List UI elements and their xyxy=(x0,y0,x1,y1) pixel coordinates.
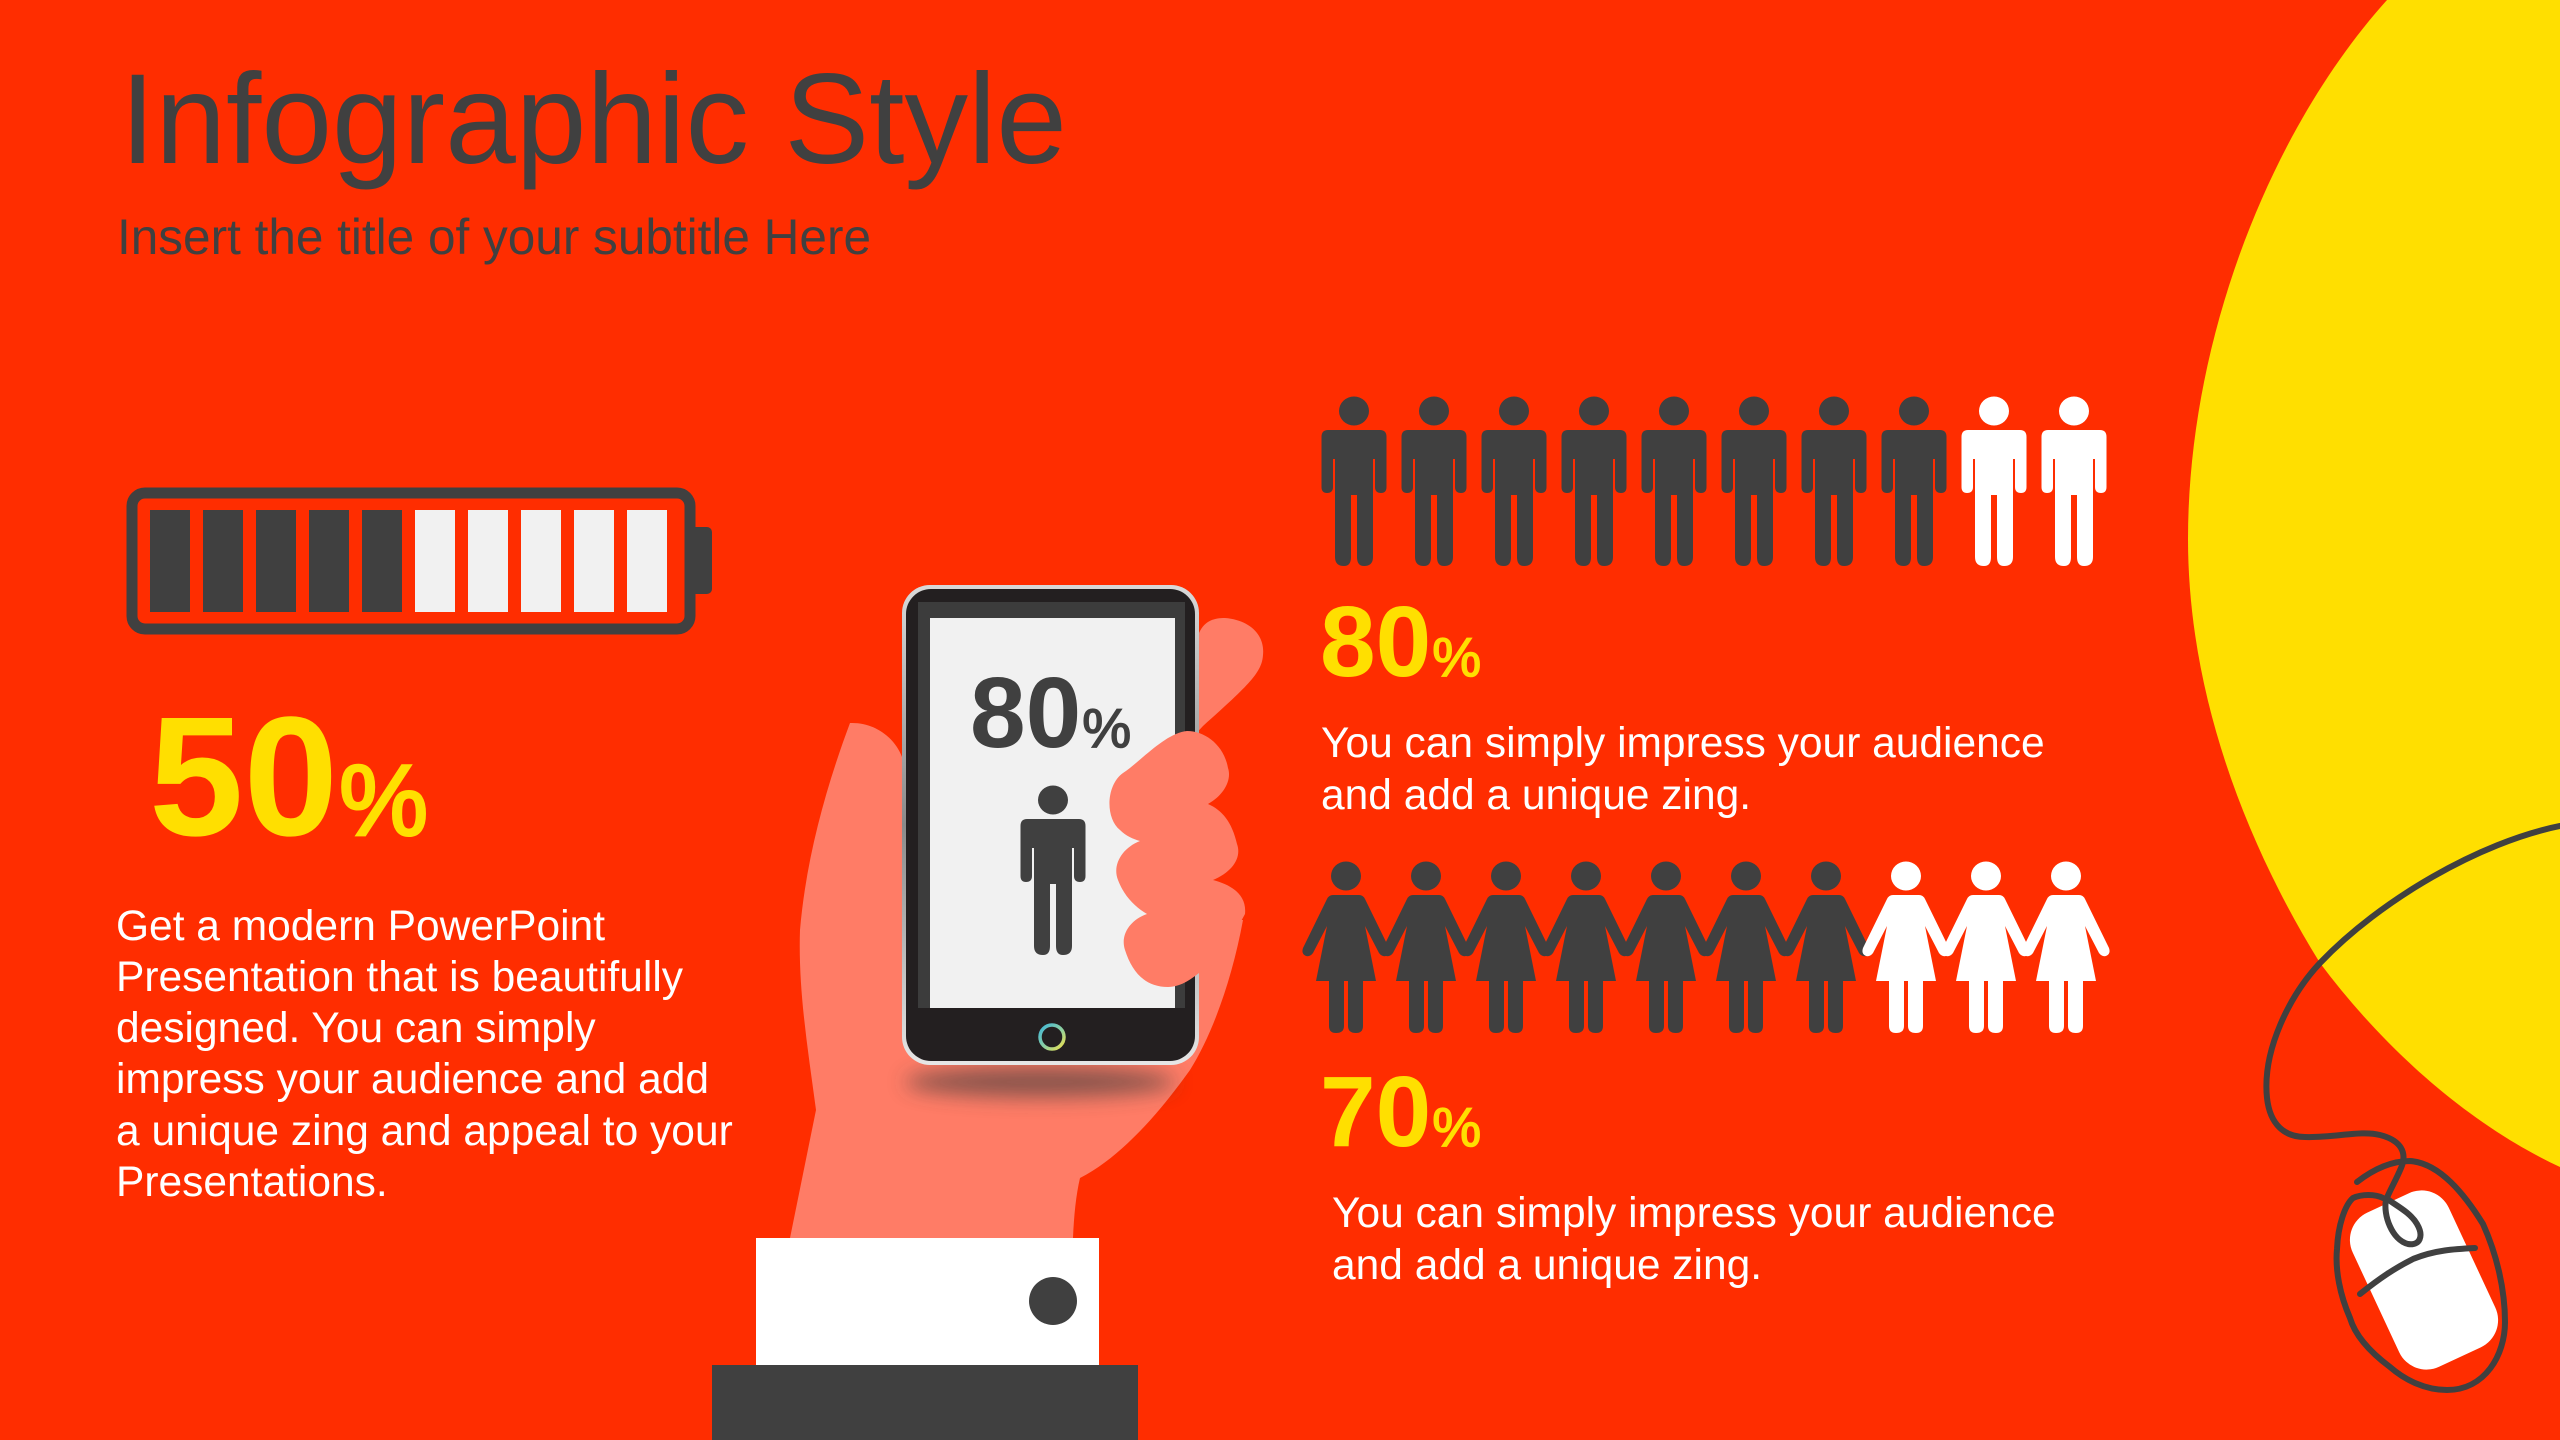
icon: shirt cuff xyxy=(756,1238,1099,1365)
icon: hand palm xyxy=(790,618,1263,1238)
title: Infographic Style xyxy=(120,48,1067,191)
icon: cuff button xyxy=(1029,1277,1077,1325)
icon: person on phone screen xyxy=(1020,786,1086,955)
icon: jacket sleeve xyxy=(712,1365,1138,1440)
text block: battery description: Presentation that is beautifully xyxy=(116,954,684,1001)
text block: battery description: designed. You can simply xyxy=(116,1005,596,1052)
stat: 80 percent: 80% xyxy=(1320,586,1481,698)
pictogram row: men xyxy=(1322,396,2106,566)
text block: battery description: Presentations. xyxy=(116,1159,388,1206)
panel: battery 50 percent xyxy=(116,493,745,1206)
phone stat: 80 percent: 80% xyxy=(970,657,1131,769)
text block: battery description: a unique zing and appeal to your xyxy=(116,1108,733,1155)
phone home button xyxy=(1040,1025,1064,1049)
pictogram row: women xyxy=(1302,862,2110,1033)
icon: computer mouse with cord xyxy=(2266,826,2560,1390)
text block: women description: You can simply impress your audience xyxy=(1332,1190,2056,1237)
icon: phone xyxy=(902,585,1199,1065)
subtitle: Insert the title of your subtitle Here xyxy=(117,209,871,265)
shadow under phone xyxy=(905,1067,1175,1097)
panel: hand holding phone xyxy=(712,585,1263,1440)
text block: men description: and add a unique zing. xyxy=(1321,772,1751,819)
text block: battery description: impress your audience and add xyxy=(116,1056,709,1103)
text block: women description: and add a unique zing. xyxy=(1332,1242,1762,1289)
stat: 70 percent: 70% xyxy=(1320,1056,1481,1168)
stat: 50 percent: 50% xyxy=(149,682,428,872)
panel: men 80 percent xyxy=(1320,396,2106,819)
yellow circle shape xyxy=(2188,0,2560,1167)
icon: fingers xyxy=(1109,731,1245,987)
text block: men description: You can simply impress your audience xyxy=(1321,720,2045,767)
panel: women 70 percent xyxy=(1302,862,2110,1289)
text block: battery description: Get a modern PowerPoint xyxy=(116,903,605,950)
icon: battery xyxy=(132,493,712,629)
